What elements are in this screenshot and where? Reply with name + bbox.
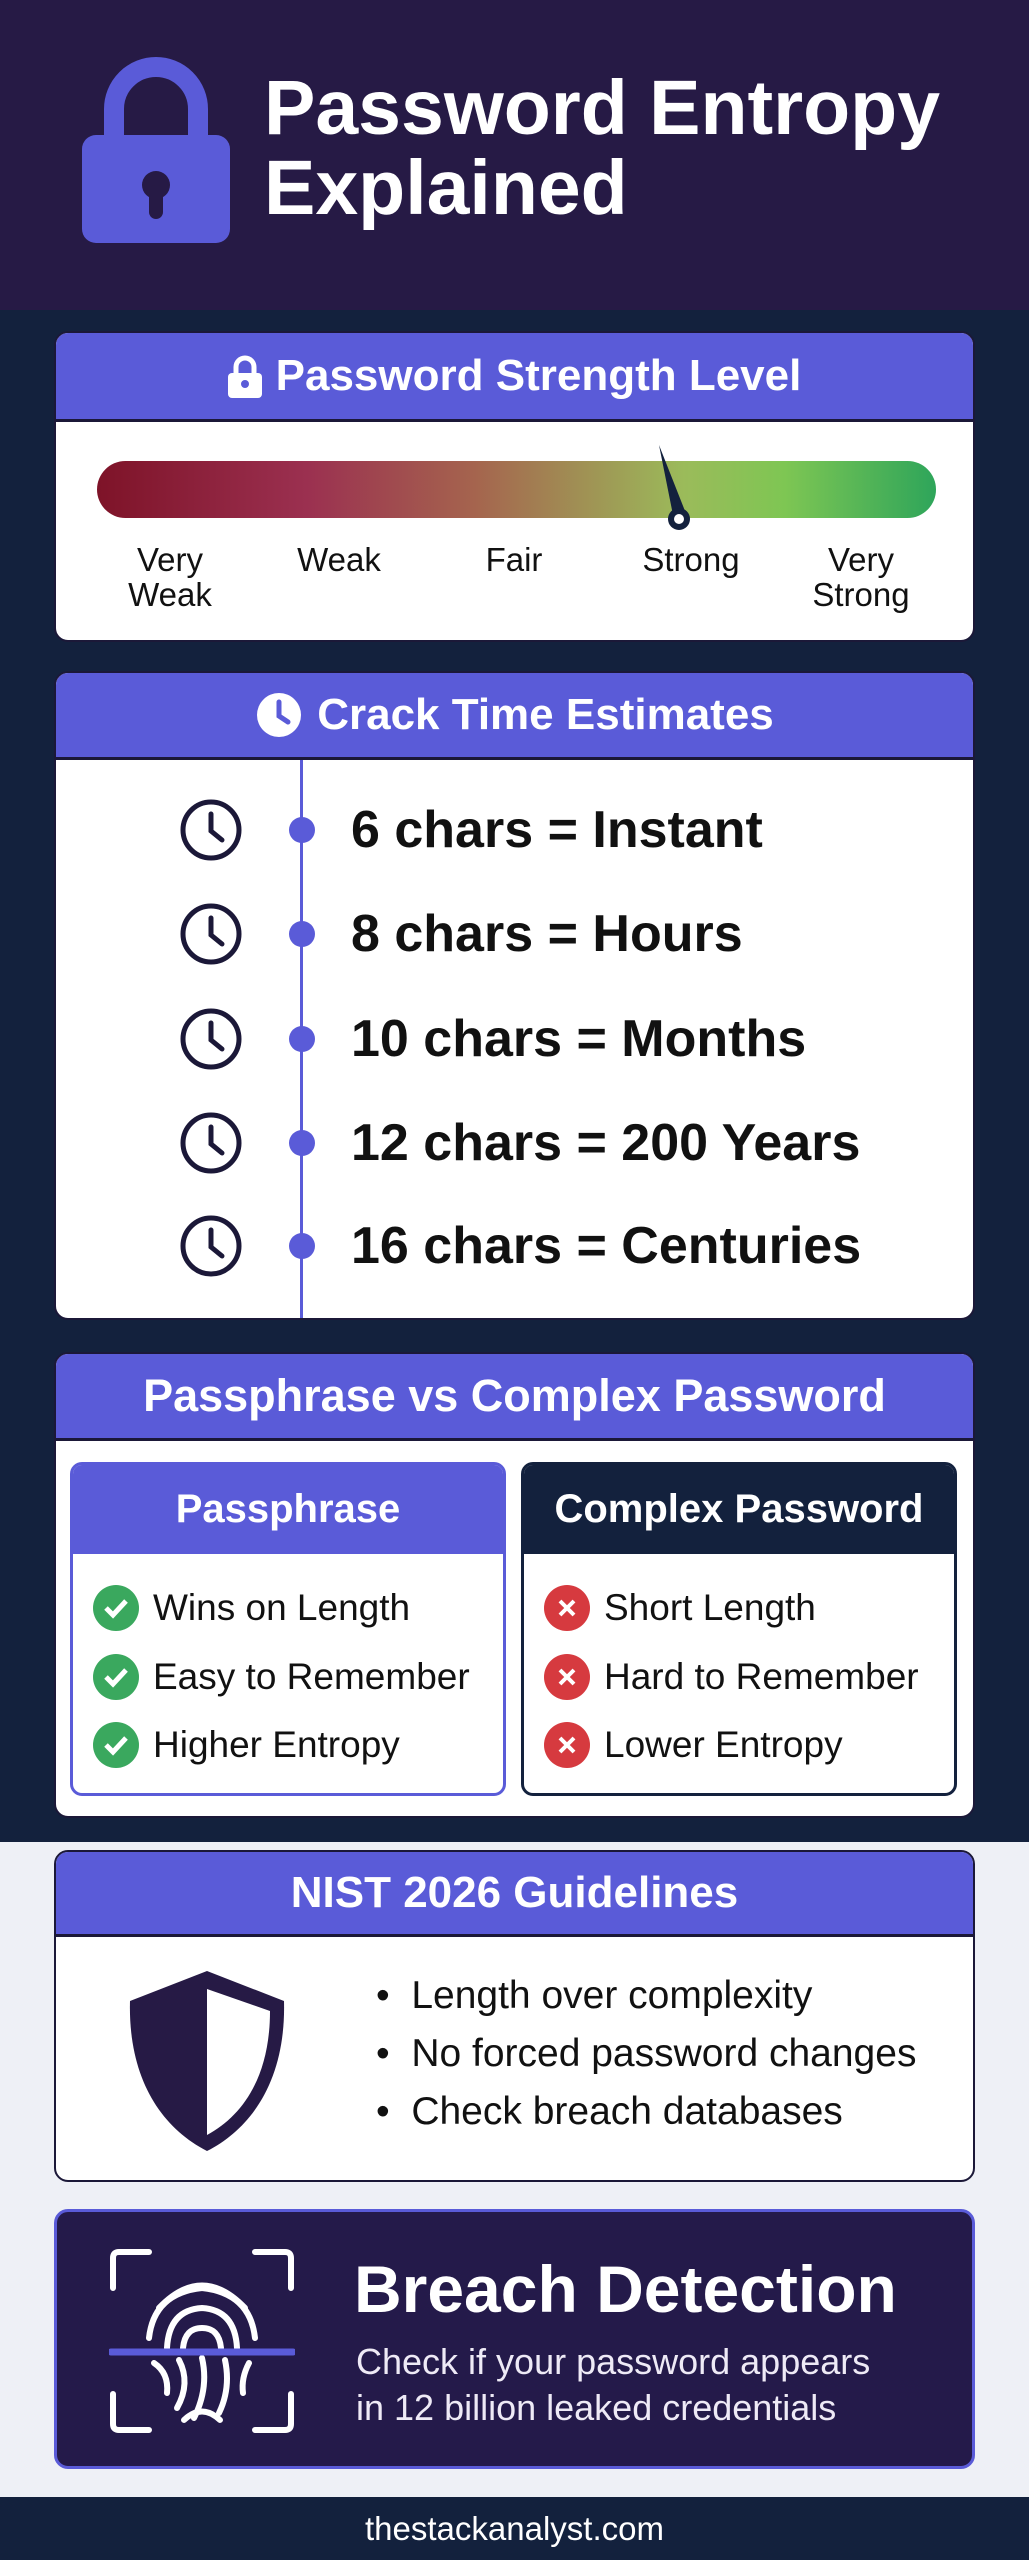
icon: shield xyxy=(130,1971,284,2151)
bullet list: • Check breach databases xyxy=(376,2090,843,2133)
panel heading xyxy=(56,333,973,422)
timeline rows xyxy=(180,800,861,1276)
panel heading: NIST 2026 Guidelines xyxy=(291,1868,738,1917)
labels: Weak xyxy=(128,576,212,613)
labels: Very xyxy=(137,541,203,578)
panel: password strength: Strong xyxy=(812,576,910,613)
panel: password strength xyxy=(54,331,975,642)
timeline rows: 6 chars = Instant xyxy=(351,801,763,859)
title: Explained xyxy=(264,145,628,231)
footer: thestackanalyst.com xyxy=(365,2510,664,2547)
card: complex password: Hard to Remember xyxy=(604,1656,919,1697)
card: complex password: Lower Entropy xyxy=(604,1724,843,1765)
light background lower xyxy=(0,1842,1029,2497)
panel: breach detection xyxy=(54,2209,975,2469)
bullet list xyxy=(376,1974,916,2133)
card: passphrase: Higher Entropy xyxy=(153,1724,400,1765)
panel heading: Password Strength Level xyxy=(276,351,801,400)
footer xyxy=(0,2497,1029,2560)
bullet list: • Length over complexity xyxy=(376,1974,812,2017)
gradient bar xyxy=(97,461,936,518)
breach description: Check if your password appears xyxy=(356,2341,870,2382)
needle xyxy=(659,445,690,530)
header band xyxy=(0,0,1029,310)
panel: crack time xyxy=(54,671,975,1320)
title xyxy=(264,65,940,231)
card: passphrase: Wins on Length xyxy=(153,1587,410,1628)
icon: fingerprint xyxy=(109,2249,295,2433)
card: complex password: Complex Password xyxy=(554,1487,924,1531)
panel heading: Passphrase vs Complex Password xyxy=(143,1370,886,1421)
panel: NIST guidelines xyxy=(54,1850,975,2182)
panel heading: Crack Time Estimates xyxy=(317,690,774,739)
timeline line xyxy=(300,760,303,1322)
panel: password strength: Strong xyxy=(642,541,740,578)
timeline rows: 16 chars = Centuries xyxy=(351,1217,861,1275)
labels xyxy=(128,541,212,613)
panel heading xyxy=(56,673,973,760)
card: passphrase: Passphrase xyxy=(176,1487,400,1531)
breach description: in 12 billion leaked credentials xyxy=(356,2387,836,2428)
icon: padlock xyxy=(82,57,230,243)
panel: passphrase vs complex xyxy=(54,1352,975,1818)
card: complex password: Short Length xyxy=(604,1587,816,1628)
card: passphrase xyxy=(70,1462,506,1796)
panel heading xyxy=(56,1852,973,1937)
breach title: Breach Detection xyxy=(354,2252,897,2326)
panel heading xyxy=(56,1354,973,1441)
timeline rows: 8 chars = Hours xyxy=(351,905,743,963)
card: passphrase: Easy to Remember xyxy=(153,1656,470,1697)
panel: password strength: Fair xyxy=(486,541,542,578)
panel: password strength: Weak xyxy=(297,541,381,578)
card: complex password xyxy=(521,1462,957,1796)
timeline rows: 12 chars = 200 Years xyxy=(351,1114,860,1172)
panel: password strength: Very xyxy=(828,541,894,578)
bullet list: • No forced password changes xyxy=(376,2032,916,2075)
breach description xyxy=(356,2341,870,2428)
timeline rows: 10 chars = Months xyxy=(351,1010,806,1068)
title: Password Entropy xyxy=(264,65,940,151)
